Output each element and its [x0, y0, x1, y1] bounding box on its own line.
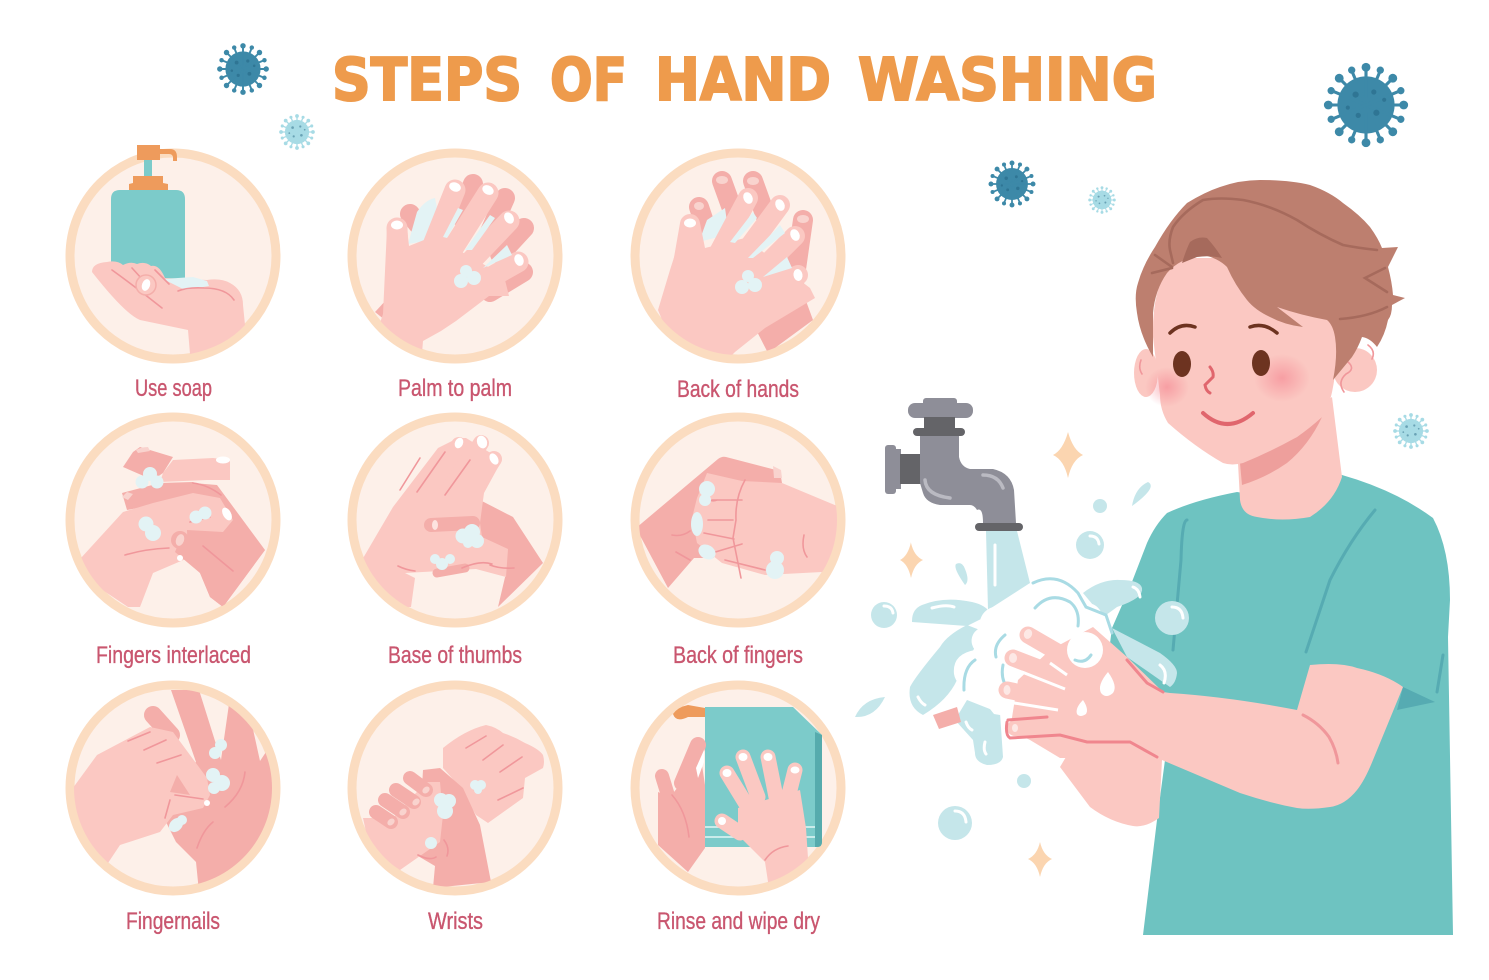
panel: back of hands [635, 153, 841, 371]
label: back of hands: Back of hands [677, 376, 799, 403]
icon: interlaced fingers [70, 447, 265, 607]
virus: light middle [1088, 186, 1116, 214]
icon: fingernails in palm [74, 690, 272, 884]
virus: dark top left [217, 43, 269, 95]
label: rinse and wipe dry: Rinse and wipe dry [657, 908, 820, 935]
label: back of fingers: Back of fingers [673, 642, 803, 669]
virus: light left [279, 114, 315, 150]
icon: cupped hand [92, 261, 245, 354]
icon: boy arm [1060, 664, 1403, 826]
label: wrists: Wrists [428, 908, 483, 935]
icon: ears [1134, 345, 1377, 397]
panel: palm to palm [352, 153, 558, 366]
icon: water splashes [855, 482, 1189, 840]
panel: rinse and wipe dry [635, 685, 841, 895]
icon: boy t-shirt [1100, 475, 1453, 935]
icon: hair [1136, 180, 1405, 380]
label: fingernails: Fingernails [126, 908, 220, 935]
title: OF [550, 45, 627, 114]
panel: wrists [352, 685, 558, 891]
illustration: boy washing hands [855, 180, 1453, 935]
icon: holding wrist [363, 725, 544, 888]
panel: fingernails [70, 685, 282, 902]
icon: sparkles [900, 432, 1083, 877]
icon: washing hands [933, 627, 1170, 758]
panel: back of fingers [635, 417, 842, 623]
icon: rubbing base of thumb [360, 434, 543, 607]
icon: two palms [375, 181, 525, 366]
icon: back of hands [658, 176, 815, 371]
virus: light right [1393, 413, 1429, 449]
panel: use soap [70, 145, 276, 359]
virus: dark top right [1324, 63, 1408, 147]
label: base of thumbs: Base of thumbs [388, 642, 522, 669]
icon: towel [673, 705, 822, 847]
icon: tap water [986, 531, 1030, 610]
icon: soap bottle [111, 145, 185, 284]
label: palm to palm: Palm to palm [398, 375, 512, 402]
icon: neck [1238, 397, 1342, 520]
title: STEPS [332, 45, 522, 114]
label: use soap: Use soap [135, 375, 212, 402]
title: WASHING [858, 45, 1157, 114]
icon: eyes, nose and mouth [1170, 325, 1277, 424]
icon: face [1153, 258, 1338, 464]
panel: base of thumbs [352, 417, 558, 623]
title: HAND [655, 45, 831, 114]
icon: drying hands [658, 745, 822, 895]
icon: back of fingers [636, 457, 842, 588]
panel: fingers interlaced [70, 417, 276, 623]
title [332, 45, 1157, 114]
label: fingers interlaced: Fingers interlaced [96, 642, 251, 669]
icon: foam [954, 588, 1109, 719]
icon: faucet [885, 398, 1023, 531]
virus: dark middle [989, 161, 1035, 207]
